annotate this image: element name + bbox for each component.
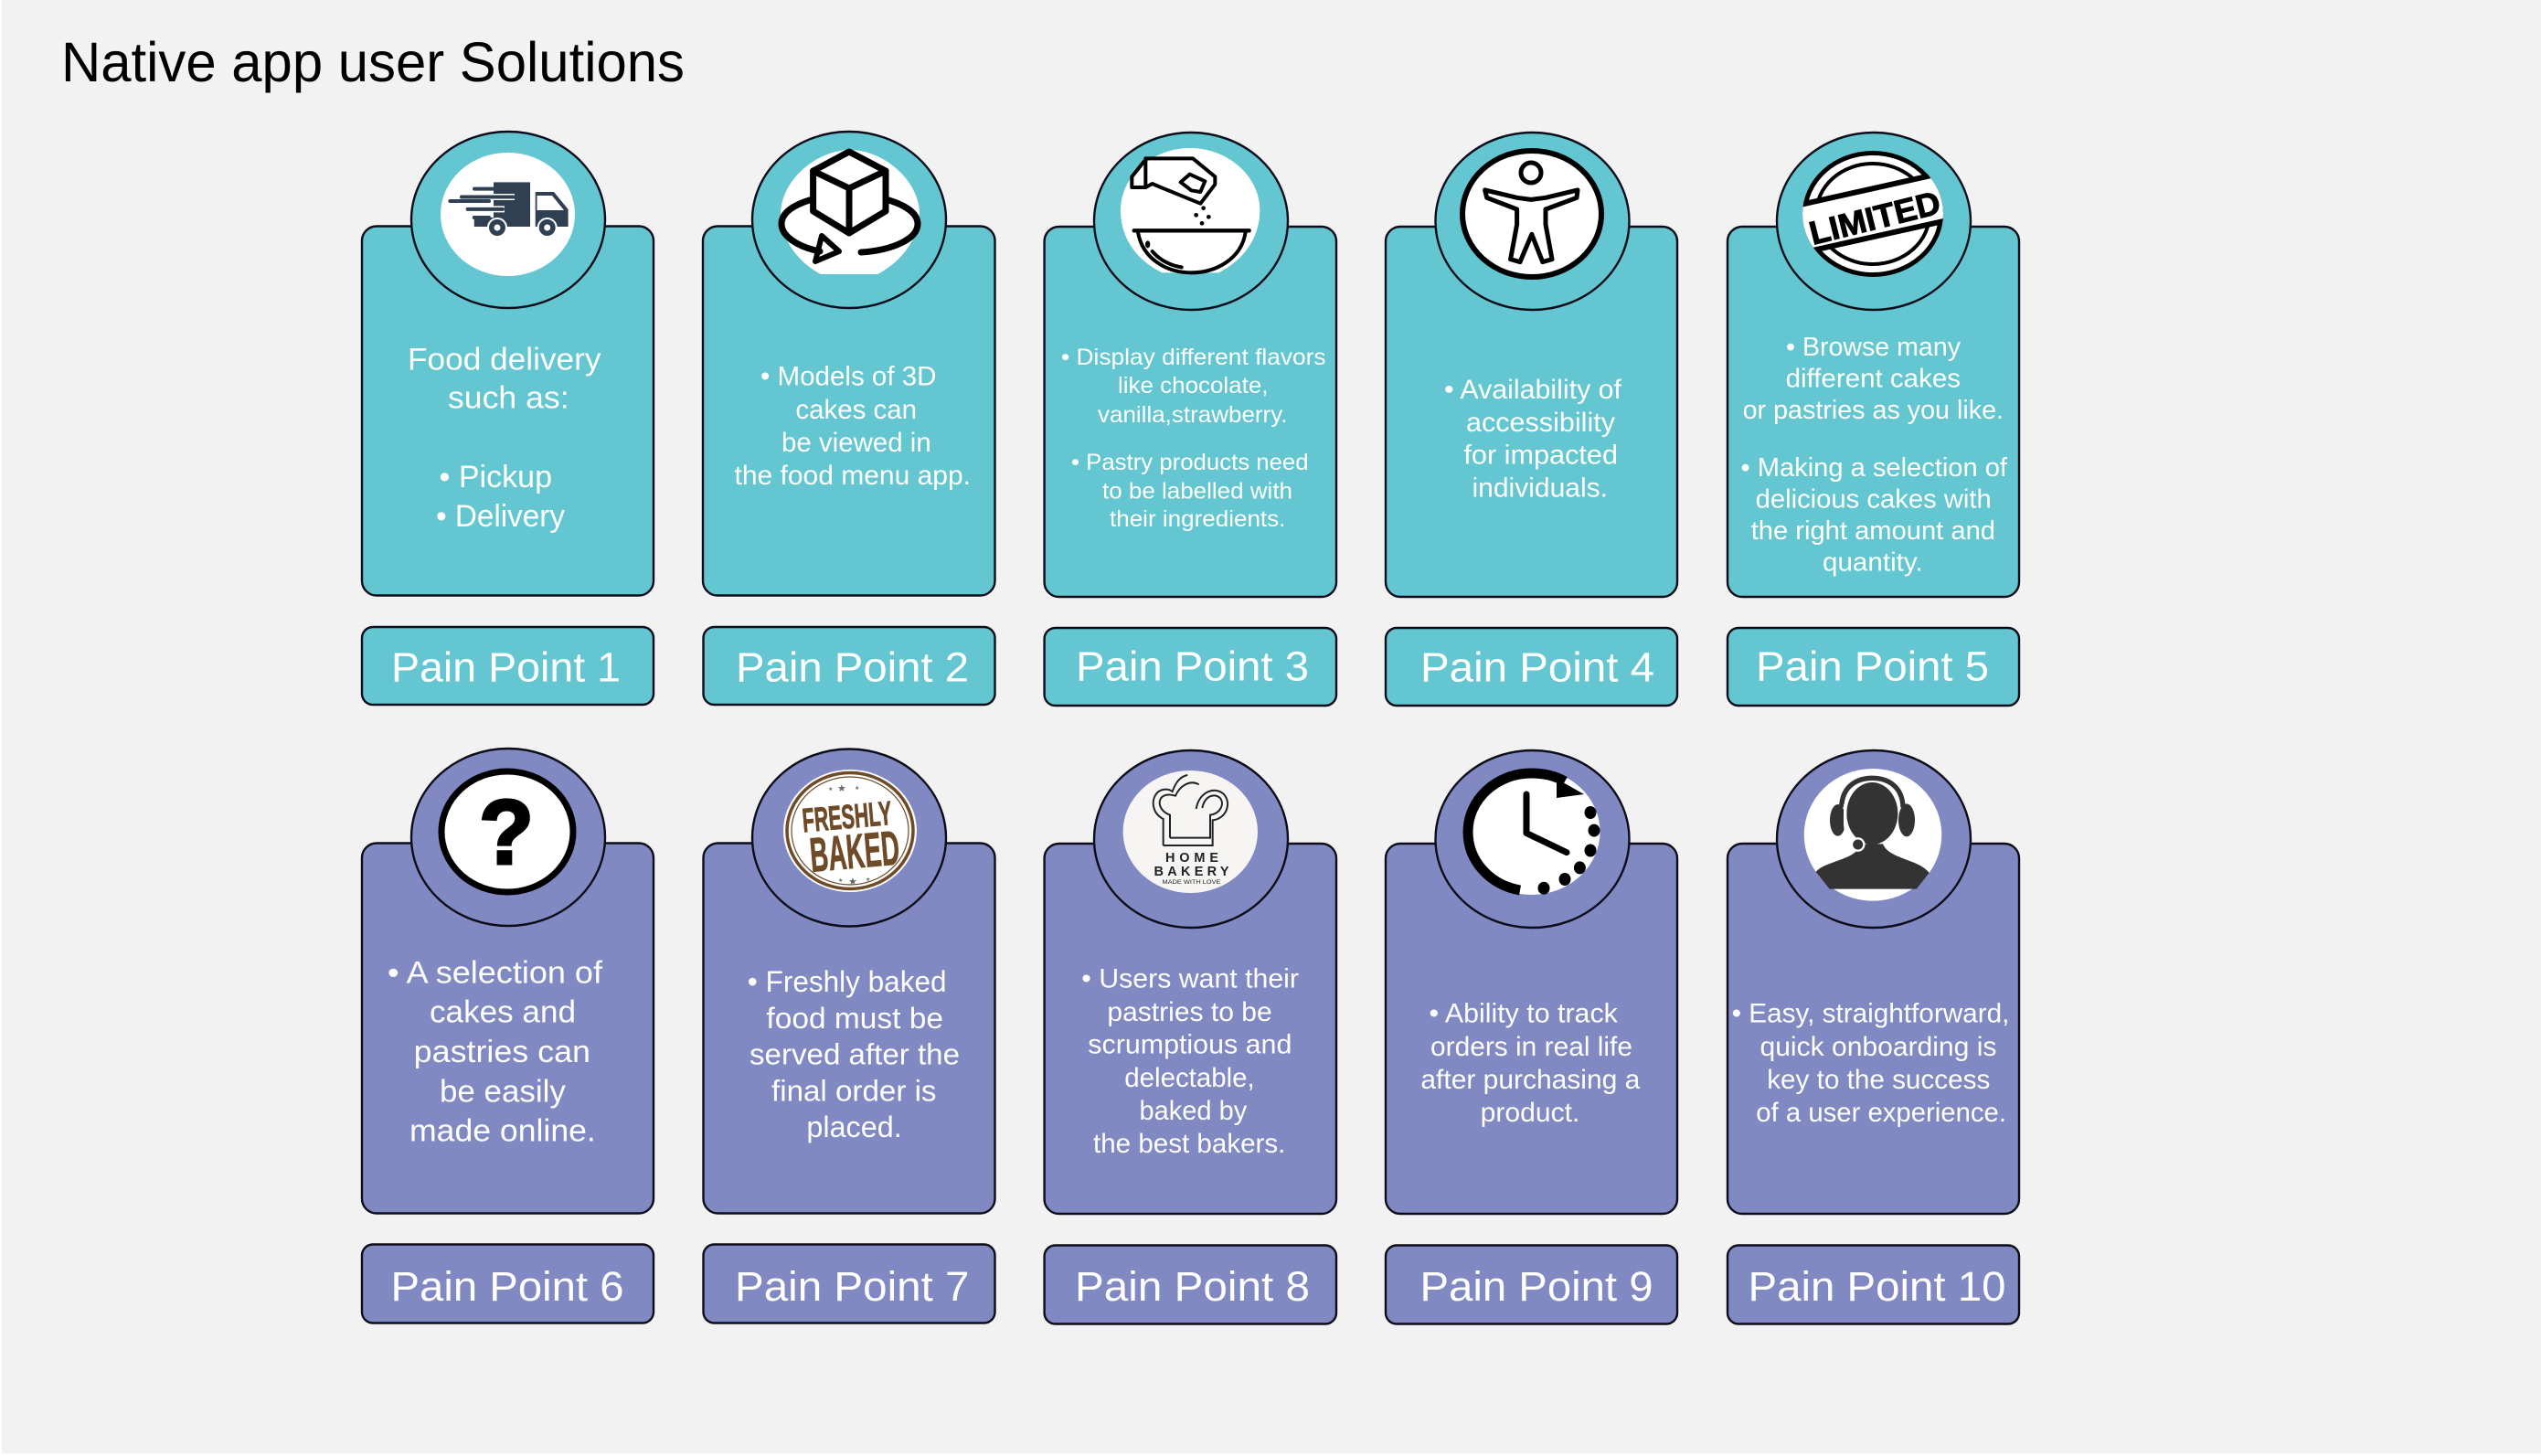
description text (735, 362, 971, 491)
description text: be easily (440, 1074, 567, 1109)
icon: freshly baked stamp: ★ (848, 876, 857, 887)
description text: key to the success (1767, 1065, 1990, 1095)
icon: question mark: ? (479, 781, 534, 884)
icon badge (752, 749, 946, 927)
label: Pain Point 9 (1386, 1245, 1677, 1323)
icon: home bakery logo (1123, 771, 1258, 893)
icon badge (1777, 750, 1971, 928)
label: Pain Point 1: Pain Point 1 (391, 643, 621, 690)
icon badge (1435, 750, 1629, 928)
description text: • Display different flavors (1061, 345, 1326, 370)
label: Pain Point 5 (1728, 628, 2019, 706)
title: Native app user Solutions (61, 31, 685, 93)
description text: • Users want their (1081, 964, 1299, 994)
description text: to be labelled with (1102, 478, 1292, 504)
description text: scrumptious and (1088, 1030, 1292, 1060)
description text: or pastries as you like. (1743, 396, 2004, 425)
icon: delivery truck (441, 153, 575, 276)
description text: • Delivery (436, 499, 566, 534)
description text (1420, 999, 1641, 1128)
icon: home bakery logo: BAKERY (1154, 865, 1229, 879)
panel: pain point 4 (1386, 133, 1677, 706)
icon: question mark (441, 771, 573, 892)
card body (703, 227, 994, 596)
label: Pain Point 8 (1045, 1245, 1336, 1323)
description text: vanilla,strawberry. (1098, 402, 1287, 428)
label: Pain Point 5: Pain Point 5 (1756, 643, 1989, 689)
description text: • Availability of (1444, 375, 1622, 405)
description text: be viewed in (781, 428, 931, 458)
description text: the food menu app. (735, 461, 971, 491)
label: Pain Point 1 (362, 627, 654, 705)
description text: delicious cakes with (1756, 484, 1992, 514)
label: Pain Point 10: Pain Point 10 (1748, 1263, 2005, 1310)
label: Pain Point 4 (1386, 628, 1677, 706)
description text (1740, 333, 2008, 578)
icon badge (411, 132, 605, 308)
panel: pain point 3 (1045, 133, 1336, 706)
description text: • Making a selection of (1740, 453, 2008, 483)
description text: final order is (771, 1075, 936, 1108)
description text: delectable, (1124, 1063, 1255, 1093)
description text: baked by (1139, 1096, 1248, 1126)
description text: quantity. (1823, 548, 1923, 578)
icon badge (1777, 133, 1971, 310)
icon: freshly baked stamp (783, 770, 917, 892)
description text: quick onboarding is (1760, 1032, 1996, 1062)
description text: placed. (806, 1111, 902, 1143)
icon badge (411, 749, 605, 926)
card body (704, 843, 994, 1214)
icon badge (1094, 750, 1288, 928)
description text: • Models of 3D (760, 362, 936, 392)
description text: product. (1481, 1098, 1579, 1128)
description text (748, 965, 960, 1143)
card body (1386, 227, 1677, 597)
description text: • Freshly baked (748, 965, 947, 998)
label: Pain Point 6: Pain Point 6 (391, 1263, 623, 1310)
description text: for impacted (1463, 441, 1618, 470)
icon: freshly baked stamp: ★ (838, 877, 843, 884)
description text: such as: (448, 380, 569, 415)
description text (408, 342, 601, 534)
description text: • Pastry products need (1071, 450, 1309, 475)
panel: pain point 8 (1045, 750, 1336, 1323)
description text: Food delivery (408, 342, 601, 377)
description text: cakes can (795, 395, 917, 425)
label: Pain Point 2: Pain Point 2 (736, 643, 969, 690)
description text: • Easy, straightforward, (1732, 999, 2009, 1029)
icon: freshly baked stamp: ★ (828, 786, 833, 792)
label: Pain Point 8: Pain Point 8 (1075, 1263, 1310, 1310)
description text: individuals. (1472, 473, 1608, 504)
icon badge (1094, 133, 1288, 310)
card body (1045, 227, 1336, 597)
description text: like chocolate, (1118, 373, 1269, 399)
icon: freshly baked stamp: FRESHLY (801, 794, 893, 839)
description text: the right amount and (1751, 516, 1995, 546)
panel: pain point 1 (362, 132, 654, 705)
icon: home bakery logo: MADE WITH LOVE (1163, 879, 1221, 886)
label: Pain Point 3: Pain Point 3 (1076, 643, 1309, 689)
label: Pain Point 7 (704, 1245, 994, 1323)
panel: pain point 5 (1728, 133, 2019, 706)
icon: home bakery logo: HOME (1165, 851, 1218, 866)
description text (1061, 345, 1326, 532)
label: Pain Point 2 (704, 627, 994, 705)
icon: limited stamp (1802, 151, 1943, 277)
label: Pain Point 7: Pain Point 7 (735, 1263, 969, 1310)
icon: freshly baked stamp: ★ (866, 877, 870, 883)
panel: pain point 9 (1386, 750, 1677, 1323)
description text: accessibility (1466, 408, 1615, 438)
panel: pain point 2 (703, 132, 994, 705)
card body (1045, 844, 1336, 1214)
label: Pain Point 10 (1728, 1245, 2019, 1323)
description text (1081, 964, 1299, 1159)
description text: pastries to be (1107, 997, 1272, 1027)
description text: • Ability to track (1430, 999, 1618, 1029)
description text: pastries can (414, 1035, 590, 1069)
description text: food must be (766, 1002, 943, 1035)
description text: made online. (409, 1114, 596, 1149)
icon: accessibility figure (1462, 151, 1601, 277)
description text (388, 955, 602, 1149)
label: Pain Point 6 (362, 1245, 654, 1323)
description text (1732, 999, 2009, 1128)
description text: • A selection of (388, 955, 602, 990)
icon: clock (1462, 769, 1600, 895)
icon: hand sprinkling into bowl (1121, 148, 1260, 272)
description text: cakes and (430, 995, 576, 1030)
description text: • Browse many (1786, 333, 1961, 362)
icon: support agent with headset (1804, 769, 1941, 901)
description text: orders in real life (1430, 1032, 1632, 1062)
description text: served after the (750, 1038, 960, 1071)
panel: pain point 10 (1728, 750, 2019, 1323)
panel: pain point 7 (704, 749, 994, 1323)
description text: different cakes (1786, 364, 1961, 393)
description text: their ingredients. (1110, 506, 1285, 532)
panel: pain point 6 (362, 749, 654, 1323)
description text: after purchasing a (1420, 1065, 1641, 1095)
card body (362, 227, 654, 596)
description text: • Pickup (439, 460, 552, 494)
card body (1728, 227, 2019, 597)
label: Pain Point 9: Pain Point 9 (1420, 1263, 1653, 1310)
description text: the best bakers. (1093, 1129, 1285, 1159)
icon: freshly baked stamp: ★ (855, 785, 859, 792)
label: Pain Point 4: Pain Point 4 (1420, 643, 1654, 691)
description text (1444, 375, 1622, 504)
icon: 3D cube rotation (781, 150, 920, 274)
description text: of a user experience. (1756, 1098, 2006, 1128)
icon badge (1435, 133, 1629, 310)
icon: limited stamp: LIMITED (1805, 184, 1944, 252)
icon: freshly baked stamp: ★ (837, 782, 846, 794)
label: Pain Point 3 (1045, 628, 1336, 706)
card body (1386, 844, 1677, 1214)
card body (1728, 844, 2019, 1214)
card body (362, 843, 654, 1214)
icon badge (752, 132, 946, 308)
icon: freshly baked stamp: BAKED (808, 821, 901, 883)
